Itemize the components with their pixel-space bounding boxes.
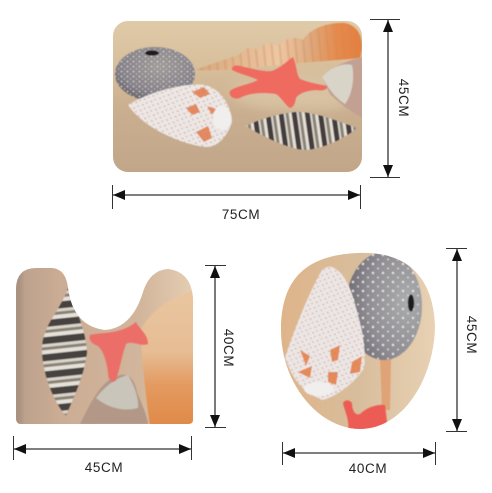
icon: starfish (230, 57, 327, 108)
arrow: 45CM height dimension of large mat (370, 20, 400, 178)
arrow: 45CM height dimension of oval mat (446, 248, 467, 432)
icon: starfish (89, 322, 148, 382)
panel: large rectangular mat (113, 21, 370, 172)
icon: sea urchin (115, 47, 195, 101)
arrow: 40CM width dimension of oval mat (282, 442, 436, 465)
icon: grey shell (80, 375, 148, 424)
label: 45CM large mat: 45CM (396, 79, 411, 117)
label: 45CM oval mat: 45CM (464, 316, 479, 354)
label: 75CM: 75CM (222, 207, 260, 222)
icon: orange spine (380, 358, 391, 410)
icon: starfish (343, 400, 388, 430)
icon: striped shell (246, 112, 357, 150)
icon: orange spiral shell (196, 23, 362, 70)
panel: U-shaped contour mat (14, 266, 196, 426)
arrow: 45CM width dimension of U mat (14, 436, 192, 460)
panel: oval toilet lid mat (280, 252, 436, 430)
label: 45CM U mat width: 45CM (85, 460, 123, 475)
arrow: 40CM height dimension of U mat (205, 266, 226, 428)
label: 40CM oval mat width: 40CM (349, 461, 387, 476)
icon: white cone shell (128, 84, 232, 147)
arrow: 75CM width dimension (112, 185, 360, 209)
icon: sea urchin (346, 252, 422, 360)
icon: right shell (322, 57, 364, 118)
icon: striped shell (42, 288, 87, 416)
icon: white cone shell (285, 267, 365, 400)
label: 40CM U mat height: 40CM (221, 329, 236, 367)
icon: orange shell (140, 290, 196, 426)
